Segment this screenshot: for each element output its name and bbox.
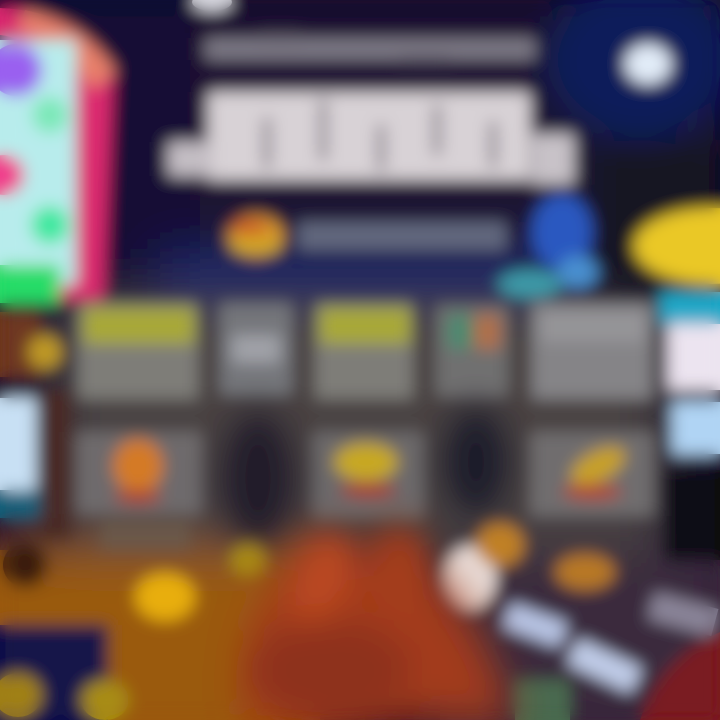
cell 1 icon	[76, 432, 202, 514]
subtitle logo	[228, 215, 284, 257]
subtitle text	[298, 222, 506, 250]
cell 5	[532, 303, 652, 399]
cell 1	[78, 303, 198, 399]
cell 4	[436, 305, 508, 397]
table bottom row	[76, 432, 654, 518]
moon glow	[625, 44, 671, 84]
heading line	[205, 34, 535, 64]
cell 3	[315, 303, 413, 399]
main headline	[168, 92, 574, 184]
hand	[243, 529, 515, 720]
finger shadows	[222, 408, 508, 544]
table top row	[78, 303, 652, 399]
top badge glow	[192, 0, 232, 11]
bottom panel reflections	[100, 522, 718, 720]
cell 5 icon	[530, 432, 654, 516]
night sky glow	[545, 0, 720, 290]
yellow dome	[634, 208, 720, 284]
cell 3 icon	[312, 432, 424, 518]
slot machine neon arch	[0, 8, 116, 303]
red corner object	[640, 632, 720, 720]
hand fingers	[250, 527, 429, 720]
title block	[168, 34, 574, 257]
cell 2	[220, 303, 292, 395]
left machine lower panels	[0, 312, 129, 720]
right sky and machine	[498, 44, 720, 560]
